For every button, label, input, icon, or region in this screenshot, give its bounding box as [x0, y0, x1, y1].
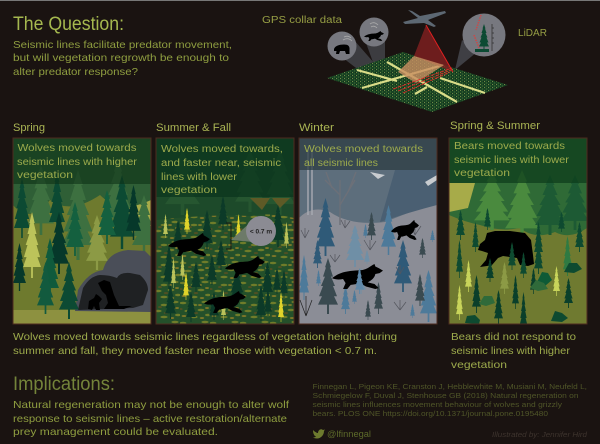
- panel text: Wolves moved towards,: [161, 144, 283, 155]
- panel: summer and fall wolves: [156, 138, 295, 324]
- wolf: pup: [88, 294, 102, 310]
- callout: vegetation height: < 0.7 m: [250, 228, 272, 236]
- callout: LiDAR tree: [462, 14, 506, 56]
- implications text: response to seismic lines – active restoration/alternate: [13, 413, 287, 425]
- heading: Implications: Implications:: [13, 374, 115, 395]
- question text: Seismic lines facilitate predator movement,: [13, 39, 232, 51]
- label: GPS collar data: GPS collar data: [262, 15, 342, 26]
- height bracket: [226, 223, 231, 249]
- panel text: vegetation: [454, 168, 510, 179]
- result text: bears: [451, 331, 576, 371]
- result text: wolves: summer and fall, they moved faster near those with vegetation < 0.7 m.: [13, 345, 377, 357]
- citation: bears. PLOS ONE https://doi.org/10.1371/journal.pone.0195480: [312, 409, 548, 418]
- LiDAR beam: [414, 25, 453, 72]
- label: LiDAR: LiDAR: [518, 28, 547, 39]
- heading: Summer and Fall: Summer & Fall: [156, 122, 231, 134]
- shrubs: [300, 220, 421, 316]
- panel text: vegetation: [17, 170, 73, 181]
- panel text: Wolves moved towards: [18, 143, 136, 154]
- wolf: running bottom: [204, 291, 246, 313]
- illustrator credit: Illustrated by: Jennifer Hird: [492, 430, 588, 439]
- callout: vegetation height: [231, 216, 276, 246]
- panel text: seismic lines with lower: [454, 155, 570, 166]
- diagram: GPS and LiDAR survey over landscape: [327, 10, 508, 112]
- bear: [478, 231, 534, 267]
- wolf: winter top: [391, 220, 419, 240]
- twitter handle: @lfinnegal: [327, 429, 371, 439]
- panel text: lines with lower: [161, 172, 238, 183]
- citation: Schmiegelow F, Duval J, Stenhouse GB (2018) Natural regeneration on: [312, 391, 579, 400]
- panel: spring and summer bears: [449, 138, 589, 330]
- panel text: Bears moved towards: [454, 141, 565, 152]
- wolf: winter bottom: [332, 264, 383, 289]
- callout: bear: [328, 32, 356, 60]
- result text: bears: vegetation: [451, 359, 507, 371]
- panel text: [161, 144, 283, 196]
- bare trees: [308, 150, 356, 225]
- panel text: and faster near, seismic: [161, 158, 281, 169]
- panel text: [17, 143, 138, 181]
- bushes: [465, 263, 582, 324]
- panel text: Wolves moved towards: [304, 144, 423, 155]
- panel: winter wolves: [299, 138, 437, 324]
- panel: spring wolves: [13, 138, 156, 324]
- question text: but will vegetation regrowth be enough to: [13, 52, 229, 64]
- result text: bears: Bears did not respond to: [451, 331, 576, 343]
- question text: [13, 39, 232, 78]
- panel text: [454, 141, 570, 179]
- heading: Winter: Winter: [299, 122, 334, 134]
- rock den: [75, 250, 152, 312]
- title: The Question: The Question:: [13, 14, 124, 35]
- question text: alter predator response?: [13, 66, 138, 78]
- implications text: [13, 399, 289, 438]
- panel text: vegetation: [161, 185, 217, 196]
- icon: plane: [403, 10, 446, 27]
- implications text: prey management could be evaluated.: [13, 426, 218, 438]
- wolf: running middle: [225, 256, 265, 278]
- panel text: all seismic lines: [304, 158, 378, 169]
- implications text: Natural regeneration may not be enough to alter wolf: [13, 399, 289, 411]
- citation: Finnegan L, Pigeon KE, Cranston J, Hebblewhite M, Musiani M, Neufeld L,: [312, 382, 587, 391]
- callout: wolf: [360, 18, 388, 46]
- wolf: sitting adult: [98, 280, 132, 309]
- wolf: running top: [168, 233, 210, 256]
- result text: wolves: Wolves moved towards seismic lines regardless of vegetation height; during: [13, 331, 397, 343]
- heading: Spring and Summer: Spring & Summer: [450, 120, 540, 132]
- seismic lines: [357, 62, 485, 102]
- panel text: [304, 144, 423, 169]
- citation: [312, 382, 587, 418]
- forest plot: [327, 52, 508, 112]
- heading: Spring: Spring: [13, 122, 45, 134]
- callout cones: [330, 32, 477, 76]
- result text: wolves: [13, 331, 397, 357]
- panel text: seismic lines with higher: [17, 157, 138, 168]
- citation: seismic lines influences movement behaviour of wolves and grizzly: [312, 400, 562, 409]
- icon: twitter bird: [313, 429, 325, 438]
- result text: bears: seismic lines with higher: [451, 345, 571, 357]
